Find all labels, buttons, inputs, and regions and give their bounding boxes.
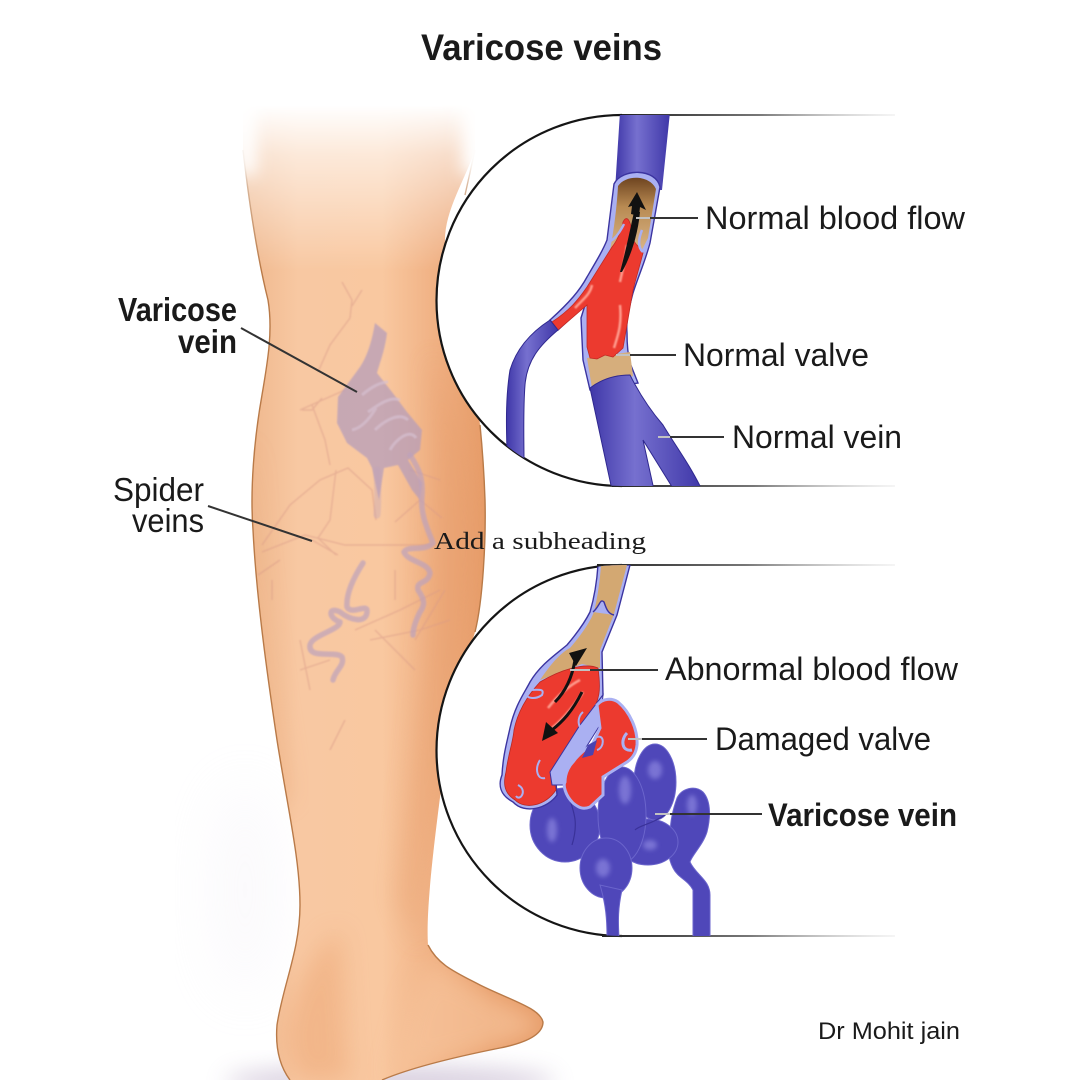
vein wall <box>550 172 660 390</box>
author credit: Dr Mohit jain <box>818 1018 960 1045</box>
upper channel valve <box>593 601 614 615</box>
right looping vein <box>669 788 710 938</box>
label: normal blood flow: Normal blood flow <box>705 200 966 236</box>
callout: varicose vein: Varicose <box>118 291 237 328</box>
red upper sac <box>505 666 599 805</box>
upper sac wall <box>500 565 630 809</box>
red blood <box>552 219 643 359</box>
blood highlights <box>575 245 627 348</box>
tan channel <box>540 565 627 680</box>
callout: spider veins: Spider <box>113 471 204 508</box>
title: Varicose veins <box>421 27 662 68</box>
lower blue vein <box>590 375 702 490</box>
varicose vein cluster <box>337 323 422 500</box>
flow arrows <box>555 660 575 702</box>
subheading text: Add a subheading <box>434 529 646 555</box>
panel: varicose vein <box>436 564 959 938</box>
lower stem <box>600 885 622 938</box>
label: normal vein: Normal vein <box>732 419 902 455</box>
panel circle <box>436 565 900 936</box>
panel: normal vein <box>436 112 966 490</box>
tan chamber <box>610 178 656 250</box>
varicose blue cluster <box>530 744 710 938</box>
lower winding veins <box>310 455 433 680</box>
left branch <box>506 320 558 462</box>
calf and heel shading <box>396 523 445 916</box>
soft edge fade at the top of the leg <box>226 85 492 175</box>
lower tan chamber <box>587 352 633 388</box>
label: abnormal blood flow: Abnormal blood flow <box>665 651 959 687</box>
illustration: leg <box>200 85 600 1080</box>
callout: varicose vein: vein <box>178 323 237 360</box>
callout: varicose vein <box>118 291 357 392</box>
valve leaflets <box>608 224 643 252</box>
blue gap in lower sac <box>582 740 597 758</box>
cluster folds <box>352 382 416 450</box>
spider veins <box>258 282 450 750</box>
label: damaged valve: Damaged valve <box>715 721 931 757</box>
callout: spider veins: veins <box>132 502 204 539</box>
upper blue vein <box>615 112 670 190</box>
leader lines <box>616 218 724 437</box>
callout: spider veins <box>113 471 312 541</box>
foot highlight <box>416 967 542 1064</box>
panel circle <box>436 115 900 486</box>
lower sac wall <box>564 699 637 808</box>
leader lines <box>570 670 762 814</box>
leg outline <box>243 150 543 1080</box>
damaged valve leaflets <box>516 690 603 798</box>
label: varicose vein: Varicose vein <box>768 797 957 833</box>
vein folds <box>570 800 665 845</box>
gap fill between sacs <box>550 695 603 785</box>
floor shadow <box>225 1066 555 1080</box>
vein highlights <box>547 761 697 877</box>
flow arrow <box>620 212 640 272</box>
label: normal valve: Normal valve <box>683 337 869 373</box>
blood highlight <box>548 680 583 728</box>
